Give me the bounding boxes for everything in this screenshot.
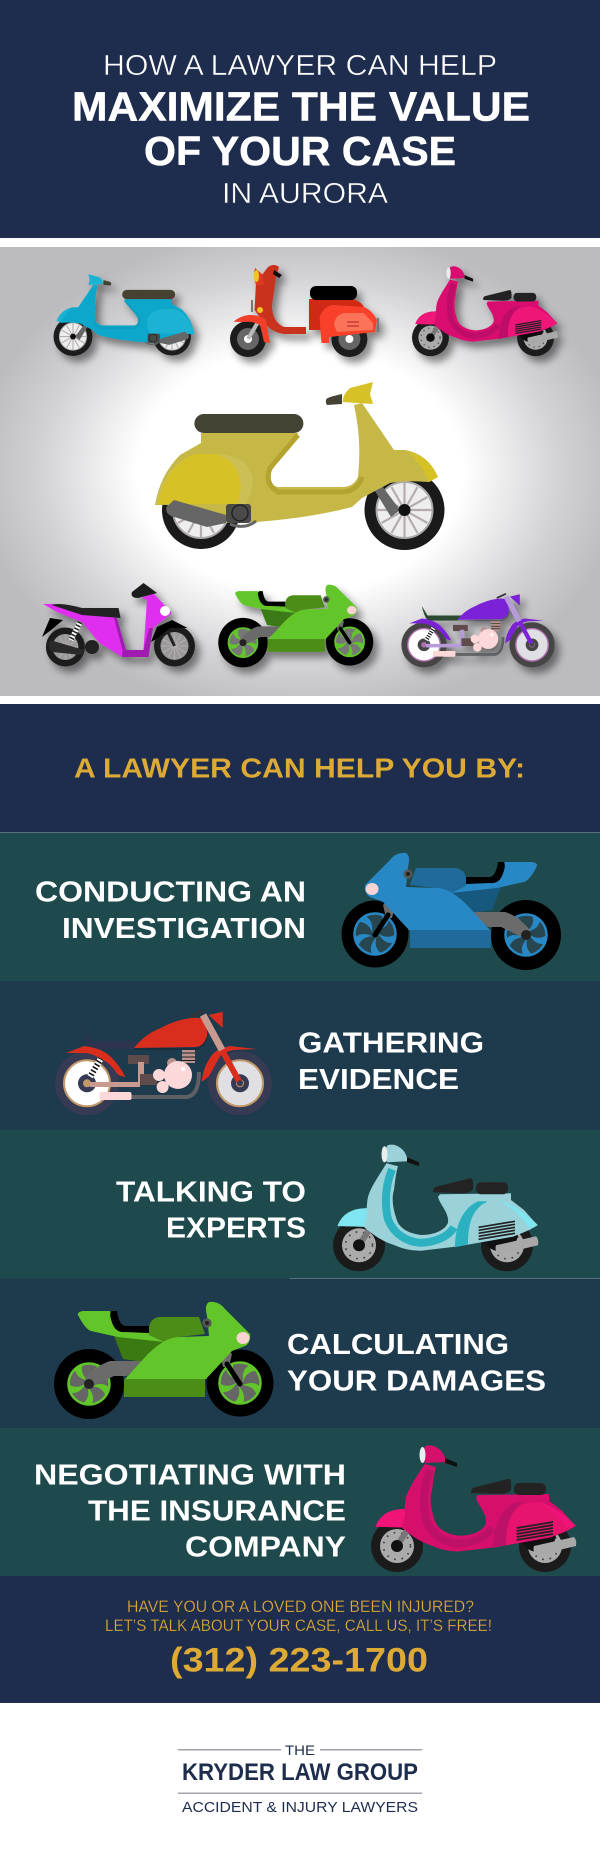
logo: the kryder law group: ACCIDENT & INJURY LAWYERS bbox=[182, 1799, 418, 1816]
text: call to action: LET’S TALK ABOUT YOUR CASE, CALL US, IT’S FREE! bbox=[105, 1617, 492, 1635]
icon: pink scooter bbox=[371, 1445, 576, 1572]
title line: of your case: OF YOUR CASE bbox=[144, 128, 456, 174]
icon: violet scooter bbox=[42, 583, 195, 666]
text: gathering evidence: GATHERING bbox=[298, 1028, 484, 1060]
icon: light blue scooter bbox=[333, 1145, 538, 1271]
text: talking to experts: TALKING TO bbox=[116, 1176, 306, 1208]
text: call to action bbox=[105, 1598, 492, 1635]
title line: in aurora: IN AURORA bbox=[222, 178, 389, 210]
text: call to action: HAVE YOU OR A LOVED ONE BEEN INJURED? bbox=[127, 1598, 474, 1616]
text: talking to experts bbox=[116, 1176, 306, 1244]
text: negotiating with the insurance company: THE INSURANCE bbox=[88, 1496, 346, 1528]
text: conducting an investigation bbox=[35, 876, 306, 945]
panel: call to action bbox=[0, 1576, 600, 1703]
text: conducting an investigation: CONDUCTING AN bbox=[35, 876, 306, 908]
heading: a lawyer can help you by: A LAWYER CAN HELP YOU BY: bbox=[74, 752, 525, 784]
icon: green sport motorcycle bbox=[218, 585, 373, 667]
title line: maximize the value: MAXIMIZE THE VALUE bbox=[72, 84, 530, 130]
panel: talking to experts bbox=[0, 1130, 600, 1279]
panel: gathering evidence bbox=[0, 981, 600, 1130]
logo: the kryder law group bbox=[178, 1742, 422, 1816]
text: negotiating with the insurance company: NEGOTIATING WITH bbox=[34, 1460, 346, 1492]
text: conducting an investigation: INVESTIGATION bbox=[62, 913, 306, 945]
text: gathering evidence: EVIDENCE bbox=[298, 1064, 459, 1096]
icon: red scooter bbox=[230, 265, 378, 357]
icon: blue sport motorcycle bbox=[342, 853, 561, 970]
text: talking to experts: EXPERTS bbox=[166, 1212, 306, 1244]
phone number: (312) 223-1700 bbox=[170, 1642, 428, 1680]
panel: negotiating with the insurance company bbox=[0, 1428, 600, 1576]
panel: gallery of motorcycles and scooters bbox=[0, 247, 600, 696]
text: negotiating with the insurance company bbox=[34, 1460, 346, 1564]
title line: how a lawyer can help: HOW A LAWYER CAN HELP bbox=[103, 50, 497, 82]
text: calculating your damages: CALCULATING bbox=[287, 1329, 509, 1361]
panel: heading band bbox=[0, 704, 600, 832]
logo: the kryder law group: THE bbox=[285, 1742, 315, 1758]
panel: header banner bbox=[0, 0, 600, 238]
icon: green sport motorcycle bbox=[54, 1302, 274, 1419]
icon: purple cruiser motorcycle bbox=[401, 594, 555, 667]
icon: red cruiser motorcycle bbox=[55, 1011, 272, 1115]
text: gathering evidence bbox=[298, 1028, 484, 1096]
logo: the kryder law group: KRYDER LAW GROUP bbox=[182, 1759, 418, 1786]
panel: conducting an investigation bbox=[0, 832, 600, 981]
panel: calculating your damages bbox=[0, 1279, 600, 1428]
text: negotiating with the insurance company: COMPANY bbox=[185, 1532, 346, 1564]
text: calculating your damages bbox=[287, 1329, 546, 1398]
icon: magenta scooter bbox=[412, 266, 558, 356]
icon: cyan scooter bbox=[54, 274, 194, 356]
icon: large yellow scooter bbox=[155, 382, 444, 550]
text: calculating your damages: YOUR DAMAGES bbox=[287, 1366, 546, 1398]
